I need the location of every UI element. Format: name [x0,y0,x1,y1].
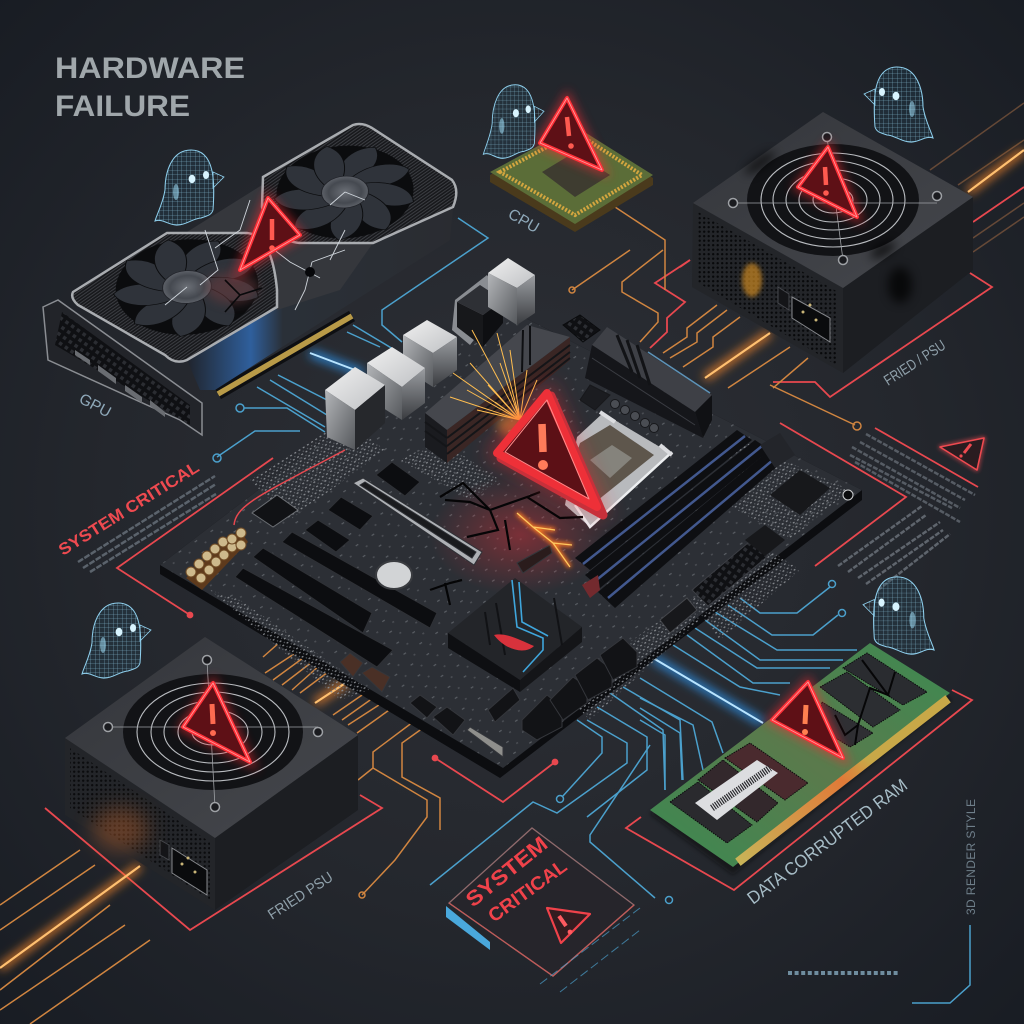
icon: ghost CPU [483,85,544,158]
barcode label [695,760,778,820]
small capacitors [580,385,658,452]
lightning [517,513,572,567]
cracks [430,483,583,605]
PCIe slots [235,462,482,667]
lower io and connectors [340,545,637,757]
dotted scale bar [788,971,898,975]
8-pin connector [563,315,600,342]
io silver blocks [325,258,535,450]
usb header [660,598,697,633]
gpu plate front [72,233,277,362]
bright orange glow traces [0,150,1024,968]
grill [728,132,942,264]
icon: ghost top right [864,67,933,142]
PSU bottom left [65,637,358,910]
ram slot highlights [582,436,780,598]
title [55,52,245,123]
GPU [43,124,456,435]
coin battery [376,561,412,589]
gpu mid body [187,185,373,310]
icon: warning triangle RAM [772,682,843,758]
icon: warning triangle top PSU [798,147,857,217]
label: CPU: CPU [505,206,542,237]
system critical panel [446,828,640,992]
label: FRIED / PSU: FRIED / PSU [881,337,949,389]
circuit traces: blue [213,218,970,1003]
crack lines [165,192,365,310]
vrm heatsink left [425,325,570,463]
right warning copy lower [838,506,950,590]
label: GPU: GPU [76,391,114,421]
gpu side [187,207,453,390]
chips [670,653,927,843]
icon: main warning triangle [497,393,603,515]
title: HARDWARE [55,52,245,85]
icon: warning triangle GPU [240,198,300,270]
fans [109,233,262,342]
atx connector [692,537,768,606]
dense circuit zones [210,420,850,720]
board base [160,305,862,778]
PSU top right [692,112,973,373]
label: FRIED PSU: FRIED PSU [265,869,336,923]
title: FAILURE [55,90,190,123]
chipset heatsink [448,578,582,692]
motherboard [160,258,862,778]
system critical panel: CRITICAL [485,856,572,927]
cpu socket [565,412,672,527]
label: DATA CORRUPTED RAM: DATA CORRUPTED RAM [743,775,911,908]
burn marks [742,149,912,303]
crack glow [430,475,610,595]
RAM module [650,643,952,875]
right side components [745,433,853,556]
panel heading: SYSTEM [462,832,552,912]
vrm heatsink right [585,327,712,438]
power socket [792,297,830,342]
icon: warning triangle bottom PSU [183,683,250,762]
ram slots [575,430,787,608]
icon: ghost bottom left [82,603,151,678]
icon: ghost GPU [155,150,224,225]
capacitor bank [186,528,248,590]
gpu plate back [262,124,456,243]
pink trace [234,450,345,525]
label: 3D RENDER STYLE: 3D RENDER STYLE [964,799,978,915]
CPU [490,126,653,232]
small warning triangle [940,438,984,470]
right warning copy top [850,434,975,522]
icon: ghost right [863,577,934,654]
damage glow [206,272,258,304]
bright blue glow traces [310,353,763,723]
circuit traces: red [45,187,1024,930]
sparks [450,330,537,420]
left warning copy: SYSTEM CRITICAL [56,458,203,559]
small chip [252,495,298,527]
icon: warning triangle CPU [540,98,602,170]
gpu gold edge [218,316,352,394]
gpu bracket and io face [43,300,202,435]
